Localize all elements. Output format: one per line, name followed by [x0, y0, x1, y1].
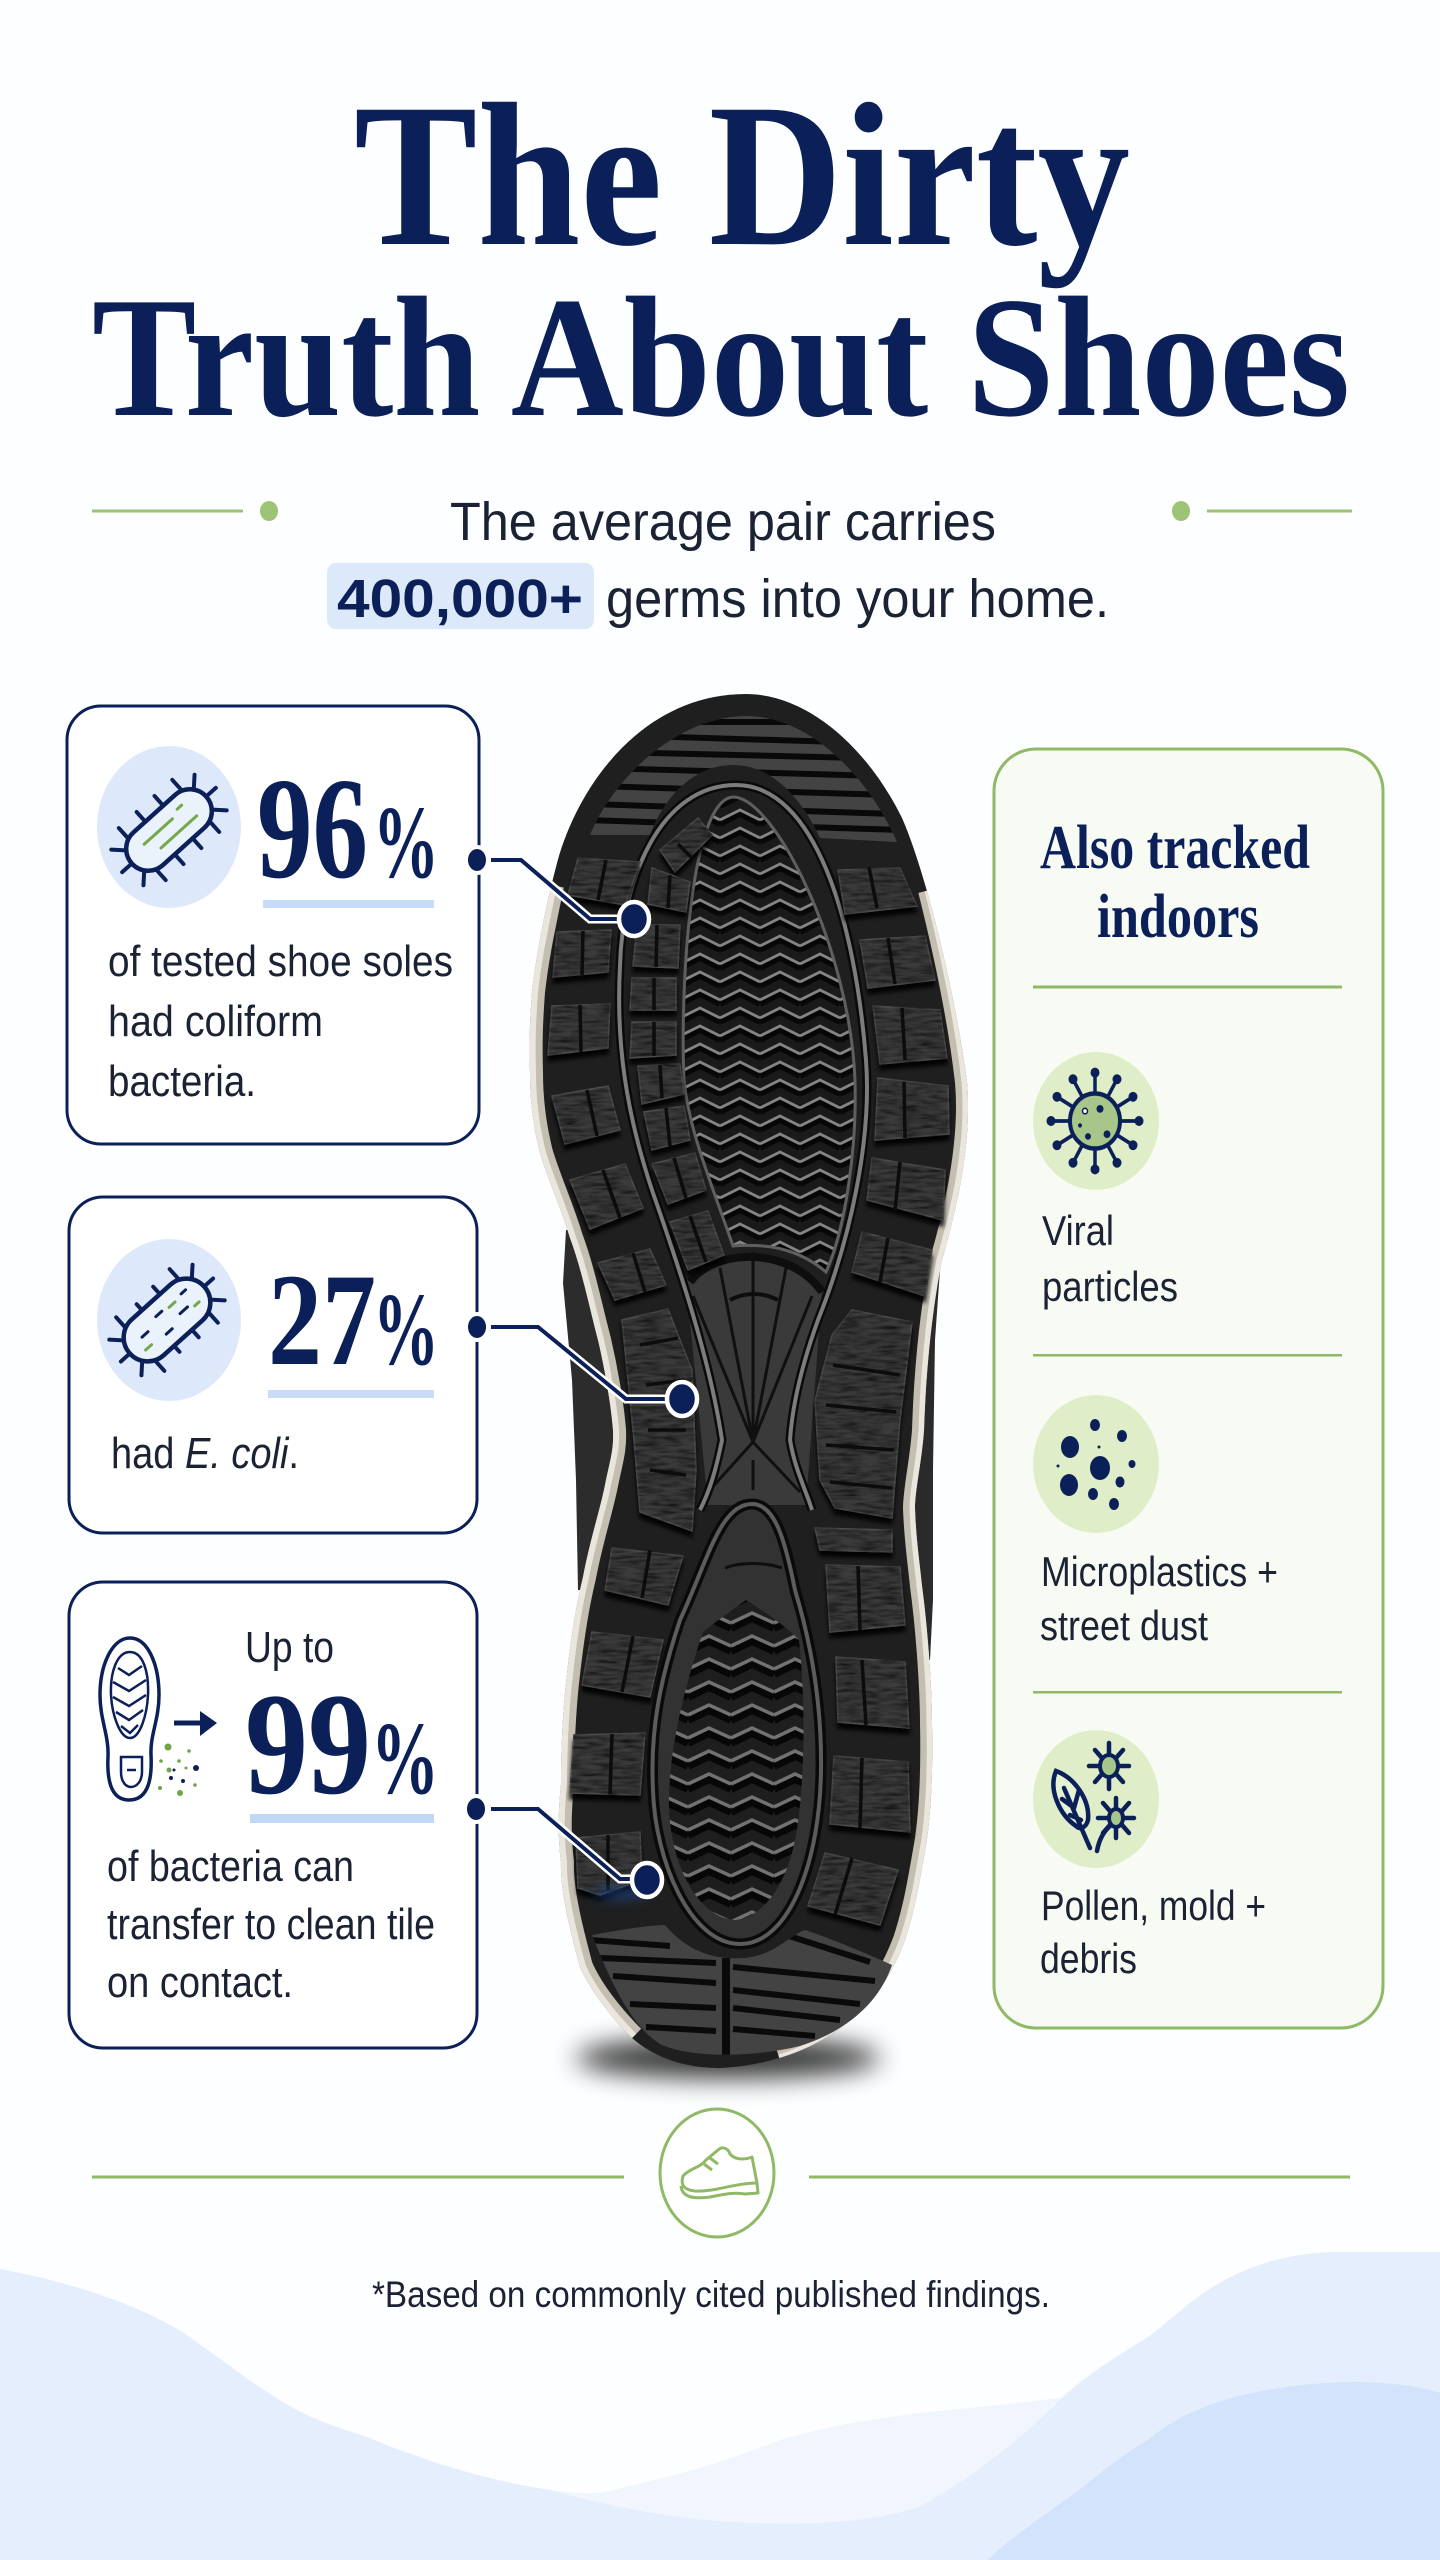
shoe sole — [530, 694, 968, 2068]
stat description: of bacteria can — [107, 1842, 354, 1891]
item label: Pollen, mold + — [1041, 1882, 1266, 1929]
callout connector: 27% — [466, 1314, 697, 1416]
tread lugs — [548, 818, 949, 1925]
stat description: on contact. — [107, 1958, 293, 2007]
stat value: 96 — [257, 749, 368, 909]
icon: shoe — [681, 2148, 758, 2198]
callout connector: 96% — [466, 847, 649, 936]
stat description — [107, 1842, 435, 2007]
footer divider with shoe badge — [92, 2109, 1350, 2237]
stat description: had E. coli. — [111, 1429, 299, 1478]
title: The Dirty — [354, 62, 1130, 289]
stat value: 27 — [268, 1246, 376, 1393]
heel tread — [669, 1600, 804, 1920]
icon: leaf and pollen — [1033, 1730, 1159, 1868]
title: Truth About Shoes — [92, 263, 1350, 453]
footnote: *Based on commonly cited published findings. — [372, 2274, 1050, 2315]
panel: also tracked indoors — [994, 749, 1383, 2028]
item label: Microplastics + — [1041, 1548, 1278, 1595]
stat card: 27% — [69, 1197, 477, 1533]
title — [92, 62, 1350, 453]
callout connector: 99% — [465, 1796, 662, 1897]
subtitle: The average pair carries — [450, 492, 996, 552]
stat card: 96% — [67, 706, 479, 1144]
stat description: had coliform — [108, 997, 323, 1046]
right rim — [780, 890, 968, 2060]
stat description: bacteria. — [108, 1057, 256, 1106]
panel heading — [1040, 814, 1310, 951]
ground shadow under shoe — [576, 2038, 880, 2078]
left rim — [530, 885, 632, 2038]
icon: microplastic particles — [1033, 1395, 1159, 1533]
right header divider — [1172, 501, 1352, 521]
panel heading: indoors — [1097, 883, 1259, 951]
stat description: transfer to clean tile — [107, 1900, 435, 1949]
item label: Viral — [1042, 1207, 1114, 1254]
item label — [1040, 1548, 1278, 1649]
heel ring — [652, 1504, 821, 1944]
icon: sole transferring germs — [100, 1638, 217, 1800]
heel bars — [592, 1925, 892, 2055]
panel heading: Also tracked — [1040, 814, 1310, 882]
icon: rod bacterium — [97, 746, 241, 908]
midfoot panel — [686, 1256, 822, 1505]
left header divider — [92, 501, 278, 521]
stat description — [108, 937, 453, 1106]
stat card: 99% — [69, 1582, 477, 2048]
stat value: % — [373, 1272, 439, 1387]
subtitle: 400,000+ — [337, 569, 583, 629]
background waves — [0, 2252, 1440, 2560]
forefoot and waist ring — [619, 785, 867, 1510]
forefoot tread — [683, 797, 855, 1272]
item label — [1042, 1207, 1178, 1310]
icon: E. coli bacterium — [97, 1239, 241, 1401]
item label — [1040, 1882, 1266, 1982]
stat description: of tested shoe soles — [108, 937, 453, 986]
subtitle — [327, 492, 1109, 629]
item label: street dust — [1040, 1602, 1208, 1649]
icon: virus — [1033, 1052, 1159, 1190]
stat value: % — [371, 1701, 439, 1816]
toe bars — [590, 716, 897, 842]
item label: particles — [1042, 1263, 1178, 1310]
lug dividers — [580, 844, 905, 1915]
up to label: Up to — [245, 1623, 334, 1672]
stat value: 99 — [245, 1663, 371, 1825]
subtitle: germs into your home. — [606, 569, 1109, 629]
stat value: % — [373, 785, 439, 900]
item label: debris — [1040, 1935, 1137, 1982]
